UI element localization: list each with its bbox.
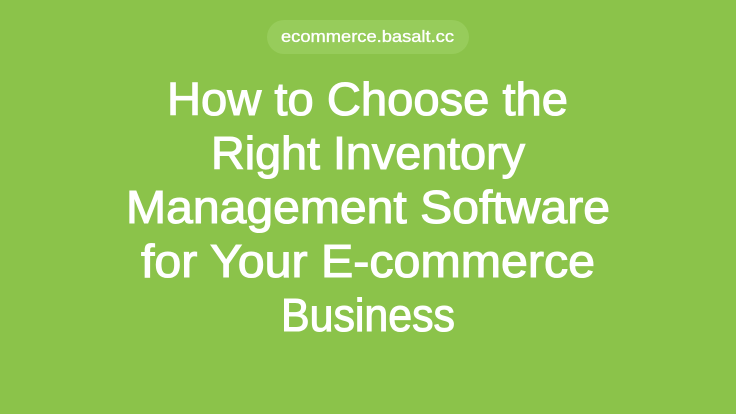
title: Management Software (126, 181, 610, 233)
source badge: ecommerce.basalt.cc (281, 27, 455, 46)
title: Business (281, 289, 455, 341)
title: for Your E-commerce (141, 235, 595, 287)
source badge (267, 20, 469, 54)
title: How to Choose the (167, 73, 568, 125)
title: Right Inventory (211, 127, 525, 179)
title (126, 73, 610, 341)
